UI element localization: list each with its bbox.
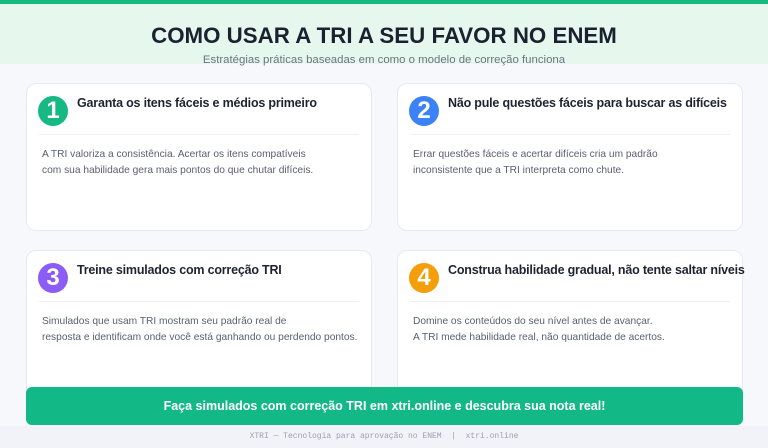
icon: number 4 xyxy=(409,263,439,293)
top bar xyxy=(0,0,768,4)
icon: number 3: 3 xyxy=(46,264,60,291)
heading 2: Não pule questões fáceis para buscar as difíceis xyxy=(448,96,727,110)
text 2 xyxy=(413,149,658,176)
title: COMO USAR A TRI A SEU FAVOR NO ENEM xyxy=(151,23,617,48)
header band xyxy=(0,4,768,64)
text 4 xyxy=(413,316,665,343)
text 3 xyxy=(42,316,357,343)
text 1 xyxy=(42,149,313,176)
text 1: A TRI valoriza a consistência. Acertar os itens compatíveis xyxy=(42,149,306,160)
panel: step 2 xyxy=(397,83,743,231)
icon: number 4: 4 xyxy=(417,264,431,291)
text 4: A TRI mede habilidade real, não quantidade de acertos. xyxy=(413,332,665,343)
heading 3: Treine simulados com correção TRI xyxy=(77,263,282,277)
text 3: Simulados que usam TRI mostram seu padrão real de xyxy=(42,316,286,327)
callout banner: Faça simulados com correção TRI em xtri.online e descubra sua nota real! xyxy=(164,399,605,413)
text 2: inconsistente que a TRI interpreta como chute. xyxy=(413,165,624,176)
heading 4: Construa habilidade gradual, não tente saltar níveis xyxy=(448,263,745,277)
text 2: Errar questões fáceis e acertar difíceis cria um padrão xyxy=(413,149,658,160)
footer: XTRI — Tecnologia para aprovação no ENEM | xtri.online xyxy=(250,432,518,441)
icon: number 1 xyxy=(38,96,68,126)
text 1: com sua habilidade gera mais pontos do que chutar difíceis. xyxy=(42,165,313,176)
heading 1: Garanta os itens fáceis e médios primeiro xyxy=(77,96,317,110)
text 3: resposta e identificam onde você está ganhando ou perdendo pontos. xyxy=(42,332,357,343)
subtitle: Estratégias práticas baseadas em como o modelo de correção funciona xyxy=(203,54,565,66)
text 4: Domine os conteúdos do seu nível antes de avançar. xyxy=(413,316,653,327)
icon: number 2: 2 xyxy=(417,97,431,124)
icon: number 1: 1 xyxy=(46,97,60,124)
panel: step 3 xyxy=(26,250,372,398)
icon: number 2 xyxy=(409,96,439,126)
callout banner xyxy=(26,387,743,425)
footer xyxy=(0,426,768,448)
panel: step 4 xyxy=(397,250,743,398)
panel: step 1 xyxy=(26,83,372,231)
icon: number 3 xyxy=(38,263,68,293)
